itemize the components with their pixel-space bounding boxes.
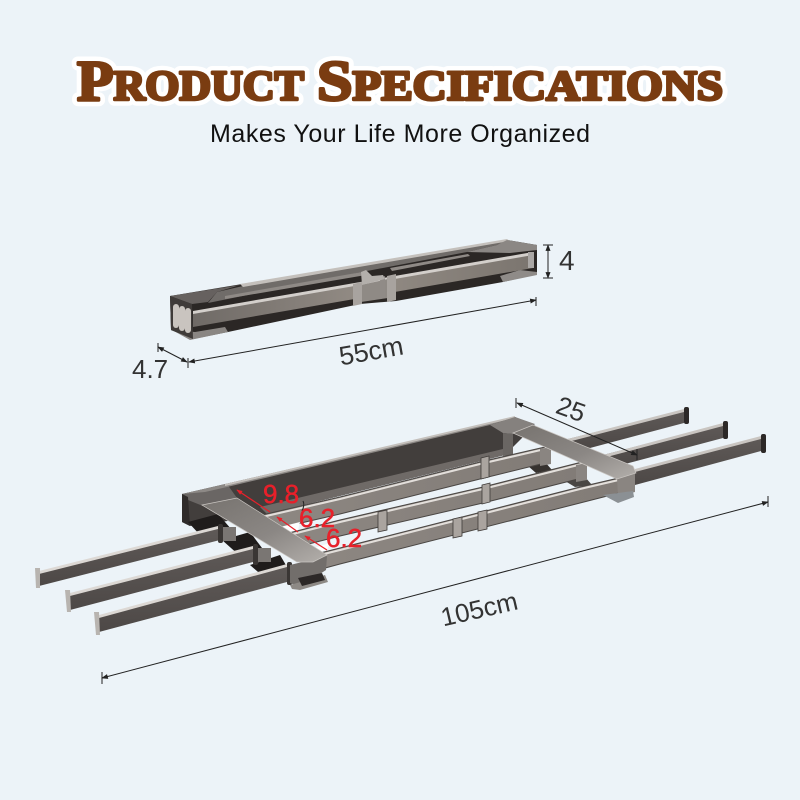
dimension: width 4.7: 4.7 <box>132 354 168 384</box>
dimension: length 55cm: 55cm <box>337 331 406 371</box>
upper side piece <box>208 241 507 303</box>
lower wall band <box>260 449 505 514</box>
left rail 2 <box>65 544 271 612</box>
right cross plate <box>513 425 636 479</box>
front bar <box>193 253 533 327</box>
red spacing dimensions <box>237 479 362 553</box>
bright gaps between rails <box>280 522 300 532</box>
dimension: length 55cm <box>188 297 536 371</box>
red spacing dimensions: 6.2 <box>299 503 335 533</box>
top left plate <box>170 285 240 304</box>
folded product <box>170 239 537 340</box>
middle rail 1 <box>262 447 551 532</box>
dimension: height 4 <box>543 245 575 278</box>
frame and wall backing <box>182 417 535 526</box>
frame right corner <box>490 417 535 434</box>
title: PRODUCT <box>77 50 304 113</box>
dimension: height 4: 4 <box>559 245 575 276</box>
middle rail 3 <box>300 477 623 574</box>
dimension: depth 25: 25 <box>552 390 590 428</box>
dimension: length 105cm: 105cm <box>438 586 521 632</box>
bottom plate <box>172 327 228 340</box>
top rim <box>182 417 515 494</box>
left rail 1 <box>35 524 236 588</box>
title: SPECIFICATIONS <box>317 50 723 113</box>
right rail 3 <box>635 434 766 485</box>
red spacing dimensions: 9.8 <box>263 479 299 509</box>
title <box>77 50 723 113</box>
right foot <box>603 491 634 503</box>
dark backing <box>170 240 537 339</box>
middle rail 2 <box>285 462 587 550</box>
title: SPECIFICATIONS <box>317 50 723 113</box>
dimension: width 4.7 <box>132 343 187 384</box>
dimension: depth 25 <box>516 390 637 460</box>
left bracket <box>290 556 327 587</box>
dimension: length 105cm <box>102 496 768 684</box>
red spacing dimensions: 6.2 <box>326 523 362 553</box>
left rail 3 <box>94 562 292 635</box>
frame left end <box>182 484 237 506</box>
extended product <box>35 407 766 635</box>
end face <box>170 296 193 339</box>
left foot <box>290 575 328 590</box>
subtitle: Makes Your Life More Organized <box>210 120 590 148</box>
right rail 1 <box>560 407 689 448</box>
top right plate <box>467 240 537 253</box>
hinge sleeves <box>361 279 388 302</box>
foot blocks <box>188 514 232 535</box>
right rail 2 <box>603 421 728 464</box>
right bracket <box>617 473 635 496</box>
left cross plate <box>202 498 327 562</box>
top rim line <box>240 239 510 287</box>
title: PRODUCT <box>77 50 304 113</box>
